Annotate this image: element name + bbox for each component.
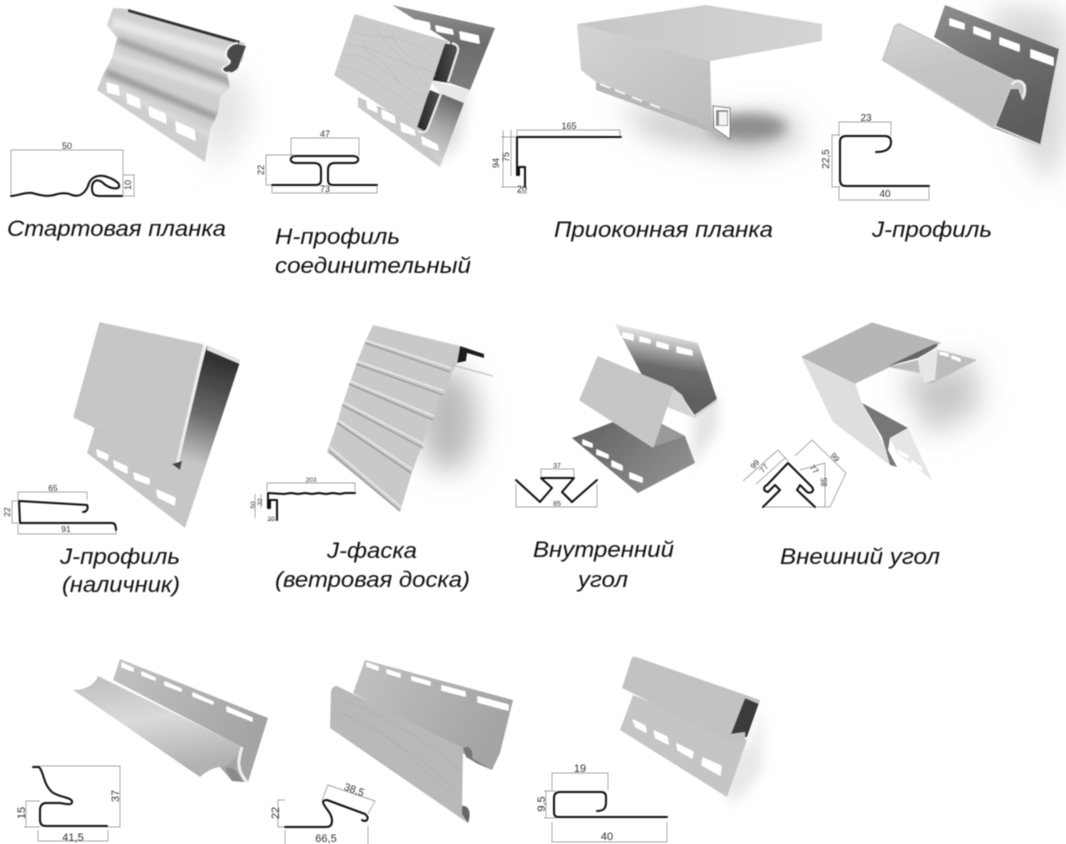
- icon: starter profile section drawing: 50: [62, 141, 72, 151]
- icon: finish strip section drawing: [16, 766, 122, 844]
- icon: J-trim 3D render: [74, 323, 240, 528]
- icon: J-chamfer section drawing: [250, 477, 355, 523]
- icon: finishing J strip section drawing: 19: [574, 763, 586, 775]
- icon: finish strip section drawing: 15: [16, 807, 28, 819]
- icon: J-profile section drawing: 40: [879, 189, 891, 200]
- text: Внешний угол: Внешний угол: [780, 544, 940, 569]
- icon: outer corner section drawing: [743, 440, 846, 507]
- icon: H-profile section drawing: 22: [256, 165, 266, 175]
- panel: J-chamfer wind board: [250, 325, 493, 592]
- icon: H-profile 3D render: [335, 5, 495, 167]
- icon: inner corner section drawing: 37: [553, 463, 561, 470]
- panel: finishing J strip: [536, 657, 762, 843]
- icon: J-trim section drawing: [2, 483, 116, 534]
- panel: finish strip: [16, 659, 268, 844]
- text: Н-профиль соединительный: Н-профиль: [275, 224, 400, 249]
- panel: outer corner: [743, 323, 980, 569]
- icon: chamfer strip 3D render: [330, 660, 513, 823]
- panel: starter strip: [7, 8, 252, 241]
- text: J-профиль (наличник): (наличник): [62, 572, 180, 597]
- icon: window strip section drawing: 20: [517, 184, 527, 194]
- icon: window strip section drawing: [491, 121, 621, 194]
- icon: J-profile section drawing: 22,5: [821, 149, 832, 169]
- panel: H-profile: [256, 5, 495, 278]
- icon: inner corner section drawing: [516, 463, 597, 508]
- icon: finish strip section drawing: 37: [110, 790, 122, 802]
- text: J-профиль: J-профиль: [871, 217, 992, 242]
- icon: starter profile section drawing: [11, 141, 135, 197]
- icon: inner corner section drawing: 85: [553, 501, 561, 508]
- icon: H-profile section drawing: 73: [320, 184, 330, 194]
- panel: J-trim casing: [2, 323, 240, 597]
- panel: J-profile: [821, 5, 1066, 242]
- icon: finish strip section drawing: 41,5: [62, 832, 84, 844]
- text: J-фаска (ветровая доска): J-фаска: [326, 538, 417, 563]
- icon: J-trim section drawing: 91: [61, 524, 71, 534]
- text: Приоконная планка: Приоконная планка: [554, 217, 773, 242]
- icon: outer corner section drawing: 99: [829, 451, 842, 464]
- icon: chamfer strip section drawing: 22: [270, 807, 282, 819]
- text: J-профиль (наличник): J-профиль: [59, 544, 180, 569]
- icon: outer corner section drawing: 77: [758, 462, 771, 475]
- text: J-фаска (ветровая доска): (ветровая доска): [275, 567, 470, 592]
- text: Стартовая планка: Стартовая планка: [7, 216, 226, 241]
- icon: J-trim section drawing: 22: [2, 507, 12, 517]
- icon: chamfer strip section drawing: [270, 781, 375, 844]
- panel: chamfer strip: [270, 660, 513, 844]
- icon: window strip section drawing: 165: [561, 121, 577, 131]
- icon: H-profile section drawing: 47: [320, 129, 330, 139]
- icon: outer corner section drawing: 99: [749, 458, 762, 471]
- icon: J-profile 3D render: [883, 5, 1066, 185]
- panel: inner corner: [516, 324, 718, 592]
- icon: starter strip 3D render: [97, 8, 252, 170]
- icon: J-trim section drawing: 65: [48, 483, 58, 493]
- text: J-профиль (наличник): [59, 544, 180, 597]
- icon: finishing J strip section drawing: 40: [601, 831, 613, 843]
- icon: finishing J strip section drawing: 9,5: [536, 796, 548, 812]
- text: Н-профиль соединительный: соединительный: [275, 253, 471, 278]
- icon: window strip section drawing: 75: [501, 152, 511, 162]
- icon: chamfer strip section drawing: 38,5: [342, 781, 366, 799]
- icon: window strip section drawing: 94: [491, 158, 501, 168]
- icon: inner corner 3D render: [572, 324, 718, 493]
- icon: J-chamfer section drawing: 20: [267, 516, 275, 523]
- icon: J-chamfer 3D render: [327, 325, 493, 512]
- icon: outer corner 3D render: [802, 323, 980, 480]
- icon: window strip 3D render: [577, 5, 822, 155]
- text: Внутренний угол: угол: [576, 567, 628, 592]
- icon: J-chamfer section drawing: 50: [250, 501, 257, 509]
- icon: finishing J strip 3D render: [620, 657, 762, 805]
- icon: finishing J strip section drawing: [536, 763, 667, 843]
- text: Н-профиль соединительный: [275, 224, 471, 278]
- icon: J-profile section drawing: 23: [860, 113, 872, 124]
- text: J-фаска (ветровая доска): [275, 538, 470, 592]
- panel: window strip: [491, 5, 822, 242]
- icon: outer corner section drawing: 85: [820, 477, 829, 486]
- text: Внутренний угол: Внутренний: [533, 537, 674, 562]
- icon: H-profile section drawing: [256, 129, 377, 194]
- icon: starter profile section drawing: 10: [123, 180, 133, 190]
- icon: J-chamfer section drawing: 203: [306, 477, 317, 484]
- text: Внутренний угол: [533, 537, 674, 592]
- icon: finish strip 3D render: [73, 659, 268, 782]
- icon: J-chamfer section drawing: 32: [257, 498, 264, 506]
- icon: outer corner section drawing: 77: [808, 463, 821, 476]
- icon: J-profile section drawing: [821, 113, 929, 200]
